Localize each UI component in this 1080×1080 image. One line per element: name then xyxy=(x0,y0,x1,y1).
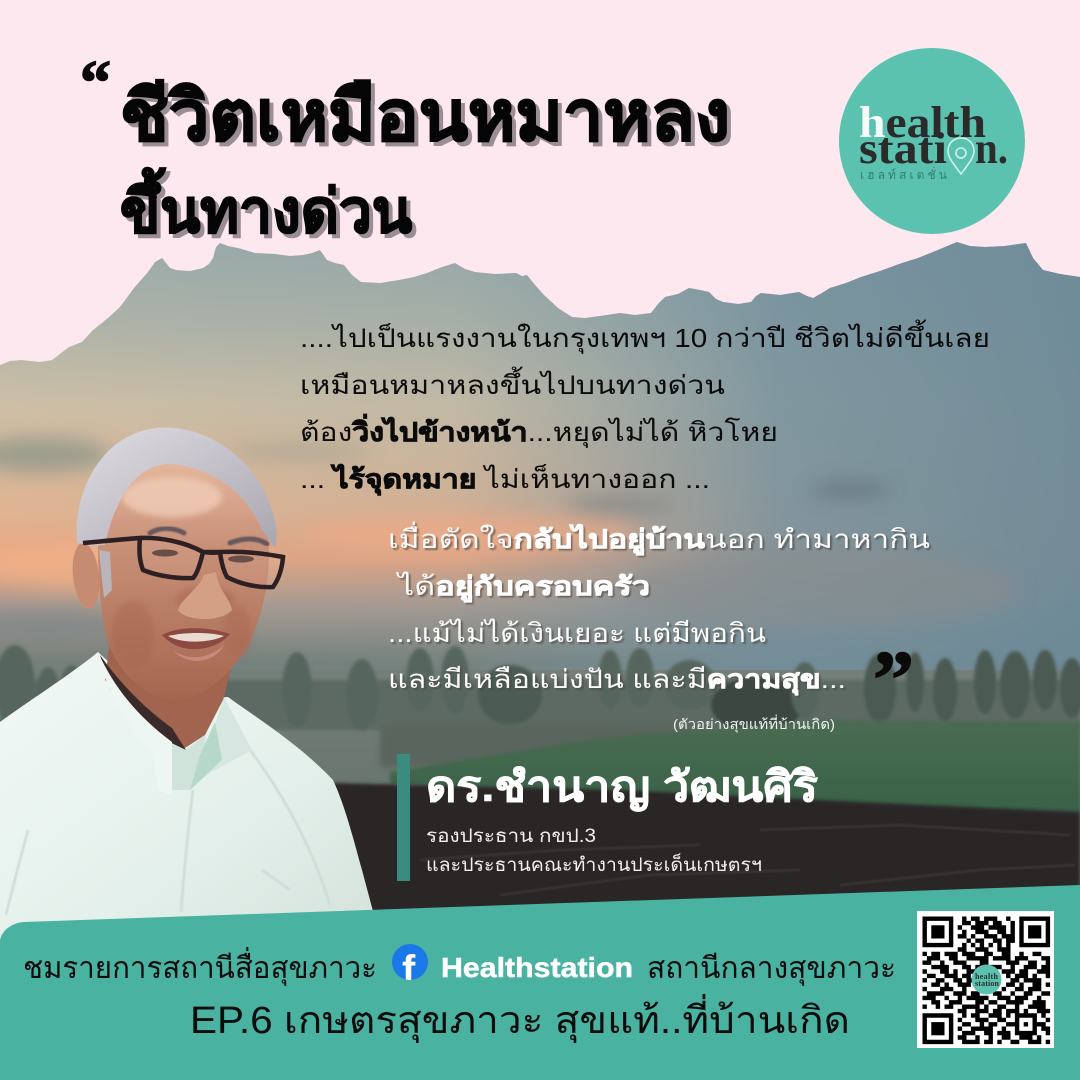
QR modules xyxy=(922,919,1050,1042)
clouds xyxy=(0,437,1020,639)
white text shadow: ...แม้ไม่ได้เงินเยอะ แต่มีพอกิน xyxy=(390,620,768,650)
white text xyxy=(388,521,930,696)
logo: health station badge: n. xyxy=(975,124,1008,173)
shirt fold lines and placket xyxy=(6,750,330,915)
inner collar xyxy=(155,735,210,790)
title shadow: ชีวิตเหมือนหมาหลง xyxy=(124,81,734,159)
footer band xyxy=(0,885,1080,1080)
text block: quote paragraph in white xyxy=(388,521,932,698)
text block: quote paragraph in black: ....ไปเป็นแรงงานในกรุงเทพฯ 10 กว่าปี ชีวิตไม่ดีขึ้นเลย xyxy=(300,319,990,354)
text block: quote paragraph in black: ... ไร้จุดหมาย ไม่เห็นทางออก ... xyxy=(300,463,710,496)
photo: mountain-shaped sunrise field landscape xyxy=(0,240,1080,920)
QR center logo: health xyxy=(975,972,999,981)
logo circle xyxy=(839,48,1025,234)
QR background xyxy=(917,911,1054,1048)
neck xyxy=(105,640,235,748)
logo wordmark: health xyxy=(859,98,986,147)
QR center logo xyxy=(972,964,1002,994)
cheek and jaw shading xyxy=(111,477,252,669)
footer background xyxy=(0,885,1080,1080)
hair xyxy=(77,428,277,548)
icon: facebook: f xyxy=(402,948,416,992)
collar left xyxy=(98,652,172,795)
title text: ชีวิตเหมือนหมาหลง xyxy=(120,77,730,155)
opening quotation mark: “ xyxy=(80,49,111,117)
QR code xyxy=(917,911,1054,1048)
icon: map pin xyxy=(948,138,974,174)
white text shadow: เมื่อตัดใจ กลับไปอยู่บ้าน นอก ทำมาหากิน xyxy=(390,523,932,558)
white text shadow xyxy=(390,523,932,698)
footer line 1: page name: Healthstation xyxy=(441,952,633,983)
logo Thai subtitle: เฮลท์สเตชั่น xyxy=(860,166,947,182)
cool tint on the right side of the sky xyxy=(260,242,1080,670)
text block: quote paragraph in black xyxy=(300,319,990,496)
closing quotation mark: ” xyxy=(873,634,914,725)
title text xyxy=(120,77,730,245)
footer line 2: episode: EP.6 เกษตรสุขภาวะ สุขแท้..ที่บ้านเกิด xyxy=(190,994,850,1043)
footer line 1: right: สถานีกลางสุขภาวะ xyxy=(647,952,896,987)
accent bar xyxy=(397,754,410,881)
title shadow xyxy=(124,81,734,249)
icon: facebook xyxy=(392,944,428,980)
hazy tree line xyxy=(0,645,1080,733)
speaker block: และประธานคณะทำงานประเด็นเกษตรฯ xyxy=(426,852,762,876)
white text: เมื่อตัดใจ กลับไปอยู่บ้าน นอก ทำมาหากิน xyxy=(388,521,930,556)
eyes xyxy=(152,550,254,562)
logo: health station badge: stati xyxy=(859,124,947,173)
logo: health station badge xyxy=(839,48,1025,234)
white text: และมีเหลือแบ่งปัน และมี ความสุข ... xyxy=(388,664,846,696)
white text: ...แม้ไม่ได้เงินเยอะ แต่มีพอกิน xyxy=(388,618,766,648)
sideburn xyxy=(99,550,112,598)
heading: title quote xyxy=(80,49,734,249)
text block: quote paragraph in black: ต้อง วิ่งไปข้างหน้า ...หยุดไม่ได้ หิวโหย xyxy=(300,413,778,448)
glasses xyxy=(83,538,283,587)
ear xyxy=(70,542,102,610)
mouth with smile xyxy=(162,628,230,661)
QR center logo: station xyxy=(975,979,1000,988)
collar right xyxy=(190,697,252,790)
white text shadow: ได้ อยู่กับครอบครัว xyxy=(398,573,652,605)
face xyxy=(98,462,269,700)
footer line 1: left: ชมรายการสถานีสื่อสุขภาวะ xyxy=(23,947,377,987)
person: portrait of Dr. Chamnan xyxy=(0,428,374,935)
speaker name: ดร.ชำนาญ วัฒนศิริ xyxy=(426,763,818,812)
sky gradient xyxy=(0,240,1080,920)
title shadow: ขึ้นทางด่วน xyxy=(124,171,416,249)
mist band behind the field xyxy=(380,725,710,767)
speaker block xyxy=(397,754,818,881)
white text shadow: และมีเหลือแบ่งปัน และมี ความสุข ... xyxy=(390,666,848,698)
rice field xyxy=(390,720,1080,815)
dark collar gap xyxy=(100,655,186,750)
eyebrows xyxy=(150,528,267,544)
dark soil xyxy=(330,783,1080,920)
nose xyxy=(178,572,232,619)
speaker role: รองประธาน กขป.3 xyxy=(426,826,596,847)
text block: quote paragraph in black: เหมือนหมาหลงขึ้นไปบนทางด่วน xyxy=(300,366,725,400)
title text: ขึ้นทางด่วน xyxy=(120,167,412,245)
caption: example of true happiness: (ตัวอย่างสุขแท้ที่บ้านเกิด) xyxy=(673,715,835,733)
white text: ได้ อยู่กับครอบครัว xyxy=(396,571,650,603)
shirt xyxy=(0,652,374,935)
soil furrow texture xyxy=(420,825,1075,895)
